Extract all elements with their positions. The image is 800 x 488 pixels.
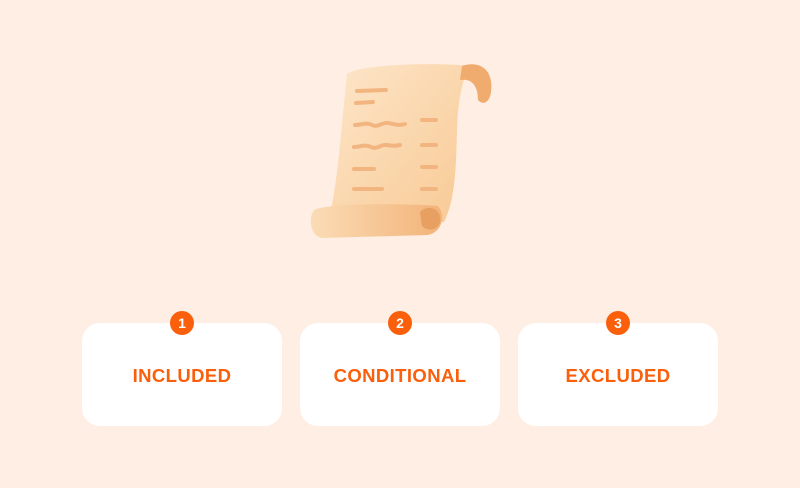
badge 1 [170, 311, 194, 335]
badge 3 [606, 311, 630, 335]
card: excluded [518, 323, 718, 426]
card: included [82, 323, 282, 426]
badge 2 [388, 311, 412, 335]
label: conditional: CONDITIONAL [334, 365, 466, 386]
badge 1: 1 [178, 315, 186, 331]
icon: scroll [310, 64, 492, 238]
card: conditional [300, 323, 500, 426]
badge 3: 3 [614, 315, 622, 331]
badge 2: 2 [396, 315, 404, 331]
label: included: INCLUDED [133, 365, 231, 386]
label: excluded: EXCLUDED [566, 365, 670, 386]
